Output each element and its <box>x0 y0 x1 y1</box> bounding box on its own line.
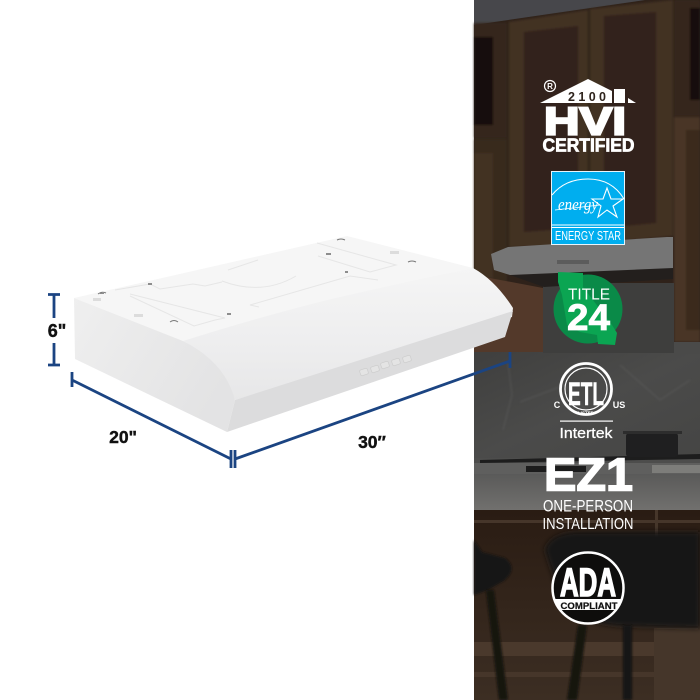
hood lower front band <box>227 311 513 432</box>
lower cabinet wood panels <box>474 510 700 700</box>
badge: ENERGY STAR: energy <box>558 195 598 214</box>
badge: EZ1 one-person installation: INSTALLATION <box>542 516 634 533</box>
dimension: depth 20 inches: 20" <box>109 427 137 447</box>
badge: Title 24 California: TITLE <box>568 286 610 304</box>
badge: Title 24 California: 24 <box>567 297 610 338</box>
badge: HVI 2100 certified: HVI <box>544 100 626 144</box>
top panel embossed details <box>115 243 396 326</box>
badge: ADA compliant: COMPLIANT <box>560 601 618 611</box>
icon: cooking pot <box>623 431 682 457</box>
bar stools <box>474 532 700 628</box>
badge: ETL listed Intertek: LISTED <box>578 410 595 416</box>
badge: EZ1 one-person installation <box>542 448 634 533</box>
lower wood cabinet beside the backsplash <box>474 275 543 352</box>
badge: EZ1 one-person installation: EZ1 <box>544 448 633 500</box>
panel: kitchen photo background <box>474 0 700 700</box>
top panel mounting holes <box>93 239 416 322</box>
badge: ETL listed Intertek: C <box>554 400 561 410</box>
dimension: height 6 inches <box>48 294 66 365</box>
badge: ETL listed Intertek: Intertek <box>560 425 613 442</box>
dimension: width 30 inches <box>235 352 510 468</box>
badge: ADA compliant <box>552 552 624 624</box>
badge: HVI 2100 certified: CERTIFIED <box>542 136 634 156</box>
badge: ETL listed Intertek: US <box>613 400 625 410</box>
badge: HVI 2100 certified <box>540 79 636 156</box>
range hood in the photo <box>491 237 673 287</box>
hood side panel <box>74 298 235 432</box>
hood curved front surface <box>183 268 513 400</box>
hood top face <box>74 236 473 341</box>
dimension: depth 20 inches <box>72 372 231 468</box>
badge: ETL listed Intertek <box>554 364 625 442</box>
product: white under-cabinet range hood <box>74 236 513 432</box>
dimension: width 30 inches: 30″ <box>358 432 387 452</box>
badge: ENERGY STAR <box>552 172 624 244</box>
badge: ETL listed Intertek: ETL <box>568 376 604 412</box>
marble backsplash <box>474 352 700 458</box>
badge: HVI 2100 certified: 2100 <box>568 90 606 104</box>
badge: EZ1 one-person installation: ONE-PERSON <box>543 498 633 516</box>
dimension: height 6 inches: 6" <box>48 321 66 341</box>
badge: Title 24 California <box>554 272 622 345</box>
badge: ENERGY STAR: ENERGY STAR <box>555 228 621 243</box>
badge: ADA compliant: ADA <box>560 561 616 605</box>
badge: HVI 2100 certified: R <box>547 82 553 91</box>
cooktop and counter <box>474 454 700 510</box>
control buttons <box>359 355 412 376</box>
